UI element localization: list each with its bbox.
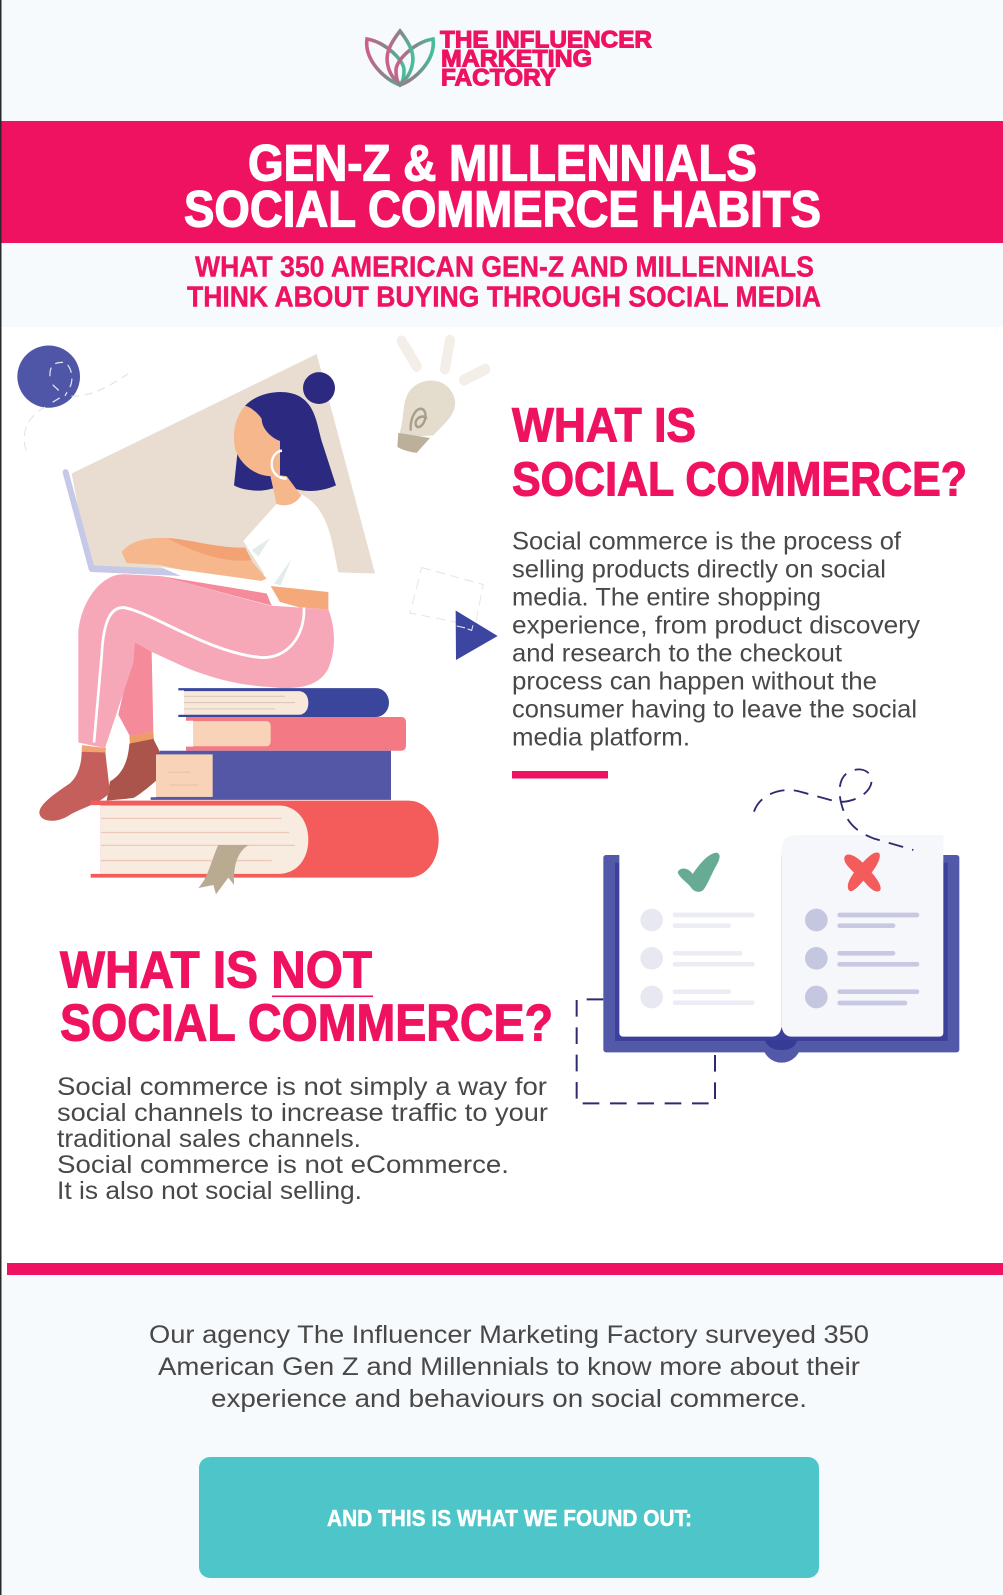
logo wordmark: THE INFLUENCER [440, 26, 652, 54]
text: survey intro: experience and behaviours on social commerce. [211, 1385, 807, 1413]
front sock [82, 745, 106, 754]
heading: what is not social commerce [60, 942, 553, 1052]
icon: cross mark [844, 852, 881, 891]
illustration: open book with pros and cons [577, 769, 959, 1103]
book: pink [186, 717, 406, 751]
woman figure [39, 372, 338, 821]
dashed rectangle [410, 568, 483, 626]
text: social commerce definition: consumer having to leave the social [512, 696, 917, 724]
book stack [91, 688, 439, 894]
icon: blue circle [17, 346, 80, 408]
pants [78, 574, 334, 748]
text: what social commerce is not: traditional sales channels. [57, 1125, 361, 1153]
earring [272, 451, 287, 479]
logo wordmark: MARKETING [441, 46, 592, 72]
right page [782, 835, 943, 1037]
text: what social commerce is not [57, 1073, 548, 1205]
arm [122, 538, 267, 582]
callout button: AND THIS IS WHAT WE FOUND OUT: [327, 1505, 692, 1531]
left list [640, 909, 755, 1008]
text: what social commerce is not: It is also not social selling. [57, 1177, 362, 1205]
book cover [603, 855, 959, 1063]
accent rule [512, 771, 608, 778]
book: blue [151, 751, 391, 800]
laptop [66, 472, 190, 573]
subtitle: WHAT 350 AMERICAN GEN-Z AND MILLENNIALS [195, 252, 814, 284]
left page [619, 830, 782, 1037]
back sock [129, 731, 154, 744]
text: what social commerce is not: social channels to increase traffic to your [57, 1099, 548, 1127]
text: what social commerce is not: Social commerce is not eCommerce. [57, 1151, 509, 1179]
text: social commerce definition: media platform. [512, 724, 690, 752]
callout button [199, 1457, 819, 1578]
text: what social commerce is not: Social commerce is not simply a way for [57, 1073, 547, 1101]
title banner [2, 121, 1003, 243]
text: survey intro [149, 1321, 869, 1413]
section divider [7, 1263, 1003, 1275]
dashed flight path [754, 769, 913, 850]
heading: what is social commerce: WHAT IS [512, 400, 696, 452]
right list [805, 909, 919, 1008]
title banner: SOCIAL COMMERCE HABITS [184, 180, 821, 238]
logo wordmark [440, 26, 652, 92]
arrow: blue triangle [456, 610, 498, 660]
text: social commerce definition: selling products directly on social [512, 556, 886, 584]
text: social commerce definition: media. The entire shopping [512, 584, 821, 612]
heading: what is not social commerce: SOCIAL COMMERCE? [60, 994, 553, 1052]
text: social commerce definition [512, 528, 921, 752]
bookmark ribbon [198, 845, 248, 894]
beige backdrop [72, 354, 375, 574]
heading: what is not social commerce: WHAT IS NOT [60, 942, 372, 1000]
text: social commerce definition: and research to the checkout [512, 640, 842, 668]
face [234, 406, 280, 476]
logo [367, 26, 652, 92]
text: social commerce definition: Social commerce is the process of [512, 528, 901, 556]
icon: check mark [678, 853, 720, 892]
subtitle: THINK ABOUT BUYING THROUGH SOCIAL MEDIA [187, 282, 821, 314]
logo mark [367, 31, 433, 85]
back leg [118, 641, 153, 736]
hair [234, 372, 336, 491]
text: survey intro: American Gen Z and Millennials to know more about their [158, 1353, 860, 1381]
logo wordmark: FACTORY [441, 64, 556, 92]
text: survey intro: Our agency The Influencer Marketing Factory surveyed 350 [149, 1321, 869, 1349]
shirt [243, 495, 338, 592]
dashed rectangle [577, 999, 715, 1103]
heading: what is social commerce [512, 400, 967, 506]
title banner: GEN-Z & MILLENNIALS [248, 134, 757, 192]
book: red [91, 801, 439, 894]
illustration: woman on books [17, 340, 498, 894]
text: social commerce definition: process can happen without the [512, 668, 877, 696]
text: social commerce definition: experience, from product discovery [512, 612, 921, 640]
neck [270, 474, 302, 507]
icon: light bulb [397, 340, 485, 453]
book: top blue [178, 688, 389, 717]
subtitle [187, 252, 821, 314]
